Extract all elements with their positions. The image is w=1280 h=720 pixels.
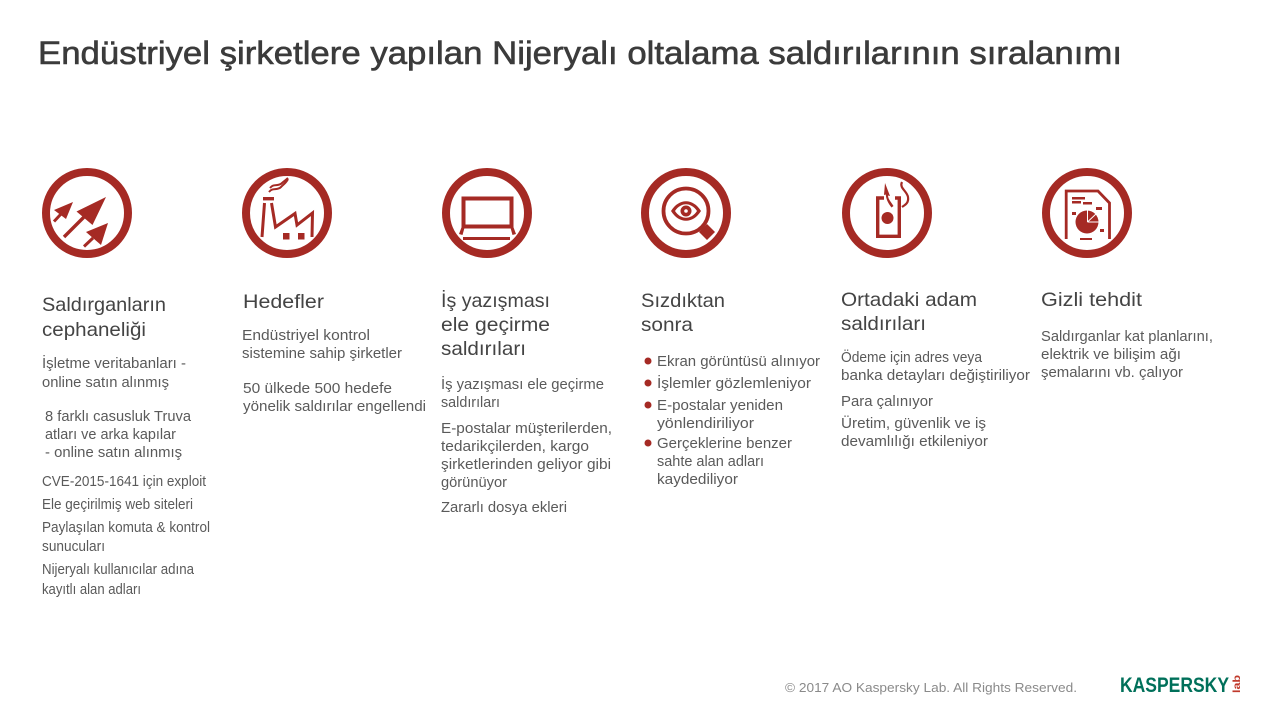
footer: copyright: © 2017 AO Kaspersky Lab. All Rights Reserved.	[785, 680, 1077, 695]
text: arsenal items: Paylaşılan komuta & kontrol	[42, 520, 210, 536]
text: arsenal items: kayıtlı alan adları	[42, 582, 141, 598]
text: arsenal items: 8 farklı casusluk Truva	[45, 409, 192, 425]
heading: after infiltration: Sızdıktan	[641, 290, 725, 312]
icon: arrows	[46, 172, 128, 254]
list: after infiltration: Ekran görüntüsü alınıyor	[657, 354, 820, 370]
text: arsenal items: sunucuları	[42, 539, 105, 555]
text: arsenal items: İşletme veritabanları -	[42, 354, 186, 372]
text: arsenal items: Nijeryalı kullanıcılar adına	[42, 562, 195, 578]
heading: email compromise: ele geçirme	[441, 314, 550, 336]
text: man in the middle body: Üretim, güvenlik ve iş	[841, 414, 986, 432]
text: email compromise body: Zararlı dosya ekleri	[441, 500, 567, 516]
panel: targets	[242, 172, 426, 415]
heading: email compromise: İş yazışması	[441, 289, 550, 312]
panel: arsenal	[42, 172, 210, 598]
text: man in the middle body: banka detayları değiştiriliyor	[841, 368, 1030, 384]
text: targets body: sistemine sahip şirketler	[242, 346, 402, 362]
text: arsenal items: online satın alınmış	[42, 375, 169, 391]
icon: document with pie chart	[1046, 172, 1128, 254]
icon: stolen banknote	[846, 172, 928, 254]
heading: man in the middle: saldırıları	[841, 313, 926, 335]
heading: after infiltration: sonra	[641, 314, 693, 336]
heading: arsenal	[42, 294, 166, 341]
text: arsenal items: CVE-2015-1641 için exploit	[42, 474, 206, 490]
list: after infiltration: İşlemler gözlemleniyor	[657, 374, 811, 392]
text: email compromise body: şirketlerinden geliyor gibi	[441, 457, 611, 473]
text: email compromise body: görünüyor	[441, 475, 507, 491]
text: man in the middle body: devamlılığı etkileniyor	[841, 434, 988, 450]
text: hidden threat body: Saldırganlar kat planlarını,	[1041, 329, 1213, 345]
text: email compromise body: saldırıları	[441, 395, 500, 411]
text: targets body: yönelik saldırılar engellendi	[243, 399, 426, 415]
heading: targets: Hedefler	[243, 291, 325, 313]
text: hidden threat body	[1041, 329, 1213, 381]
text: targets body: 50 ülkede 500 hedefe	[243, 381, 392, 397]
text: email compromise body	[441, 375, 612, 516]
list: after infiltration: Gerçeklerine benzer	[657, 436, 792, 452]
text: email compromise body: tedarikçilerden, kargo	[441, 439, 589, 455]
panel: hidden threat	[1041, 172, 1213, 381]
text: targets body	[242, 328, 426, 415]
text: hidden threat body: elektrik ve bilişim ağı	[1041, 347, 1181, 363]
logo: Kaspersky Lab: lab	[1232, 675, 1243, 693]
title: Endüstriyel şirketlere yapılan Nijeryalı oltalama saldırılarının sıralanımı	[38, 35, 1122, 71]
logo: Kaspersky Lab: KASPERSKY	[1120, 673, 1229, 697]
panel: man in the middle	[841, 172, 1030, 450]
heading: man in the middle	[841, 289, 977, 335]
list: after infiltration: E-postalar yeniden	[657, 398, 783, 414]
heading: man in the middle: Ortadaki adam	[841, 289, 977, 311]
list: after infiltration: kaydediliyor	[657, 472, 738, 488]
heading: arsenal: cephaneliği	[42, 319, 146, 341]
text: hidden threat body: şemalarını vb. çalıyor	[1041, 365, 1183, 381]
heading: after infiltration	[641, 290, 725, 336]
text: man in the middle body: Para çalınıyor	[841, 394, 933, 410]
heading: arsenal: Saldırganların	[42, 294, 166, 316]
text: arsenal items: atları ve arka kapılar	[45, 427, 176, 443]
text: email compromise body: E-postalar müşterilerden,	[441, 421, 612, 437]
text: arsenal items: Ele geçirilmiş web siteleri	[42, 497, 193, 513]
text: arsenal items: - online satın alınmış	[45, 445, 182, 461]
text: man in the middle body	[841, 348, 1030, 450]
text: arsenal items	[42, 354, 210, 598]
list: after infiltration	[644, 354, 820, 488]
icon: factory	[246, 172, 328, 254]
heading: email compromise	[441, 289, 550, 360]
text: email compromise body: İş yazışması ele geçirme	[441, 375, 604, 393]
list: after infiltration: sahte alan adları	[657, 454, 764, 470]
heading: hidden threat: Gizli tehdit	[1041, 289, 1143, 311]
icon: laptop	[446, 172, 528, 254]
list: after infiltration: yönlendiriliyor	[657, 416, 754, 432]
panel: business email compromise	[441, 172, 612, 516]
panel: after infiltration	[641, 172, 820, 488]
text: targets body: Endüstriyel kontrol	[242, 328, 370, 344]
heading: email compromise: saldırıları	[441, 338, 526, 360]
text: man in the middle body: Ödeme için adres veya	[841, 348, 983, 366]
icon: magnifier with eye	[645, 172, 727, 254]
